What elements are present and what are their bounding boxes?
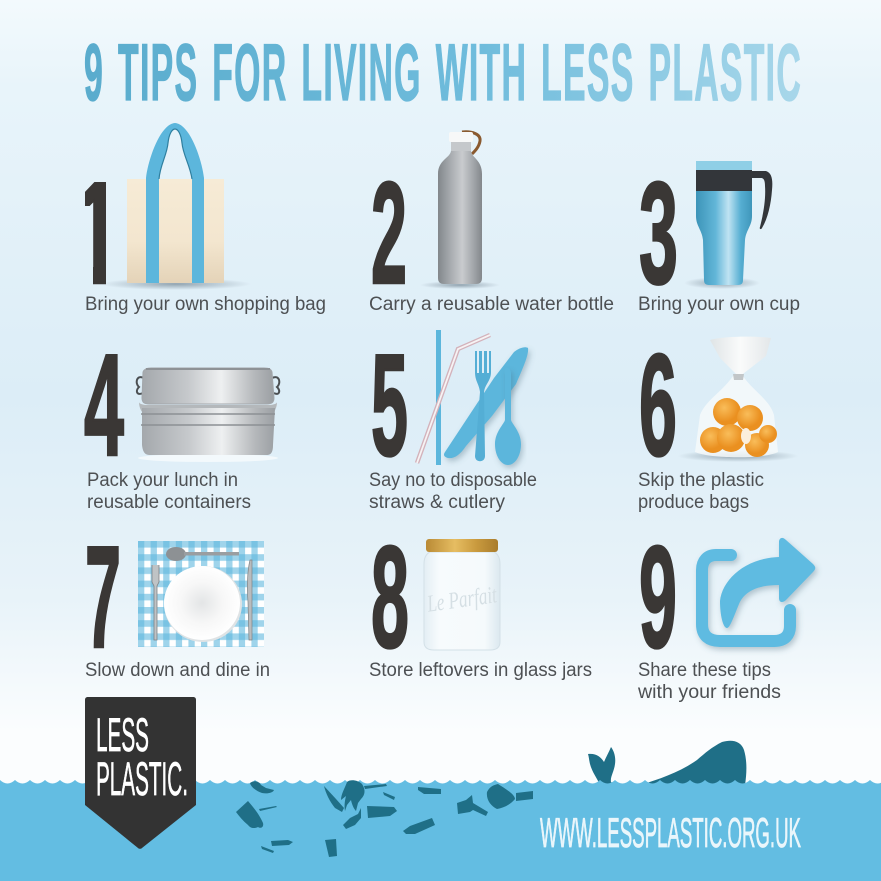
icon: tote bag xyxy=(101,123,251,290)
caption: Store leftovers in glass jars xyxy=(369,660,592,681)
logo text: LESS xyxy=(96,708,149,761)
tip 5: straws and cutlery xyxy=(369,324,537,513)
caption: produce bags xyxy=(638,492,749,513)
tip 6: produce bag xyxy=(638,324,798,513)
icon: metal bottle xyxy=(420,132,500,289)
tip 7: dine in: 7 xyxy=(85,516,121,678)
text: PLASTIC. xyxy=(96,752,188,805)
caption xyxy=(637,660,781,703)
caption: Pack your lunch in xyxy=(87,470,238,491)
caption: Say no to disposable xyxy=(369,470,537,491)
caption: Carry a reusable water bottle xyxy=(369,294,614,315)
caption: Bring your own shopping bag xyxy=(85,294,326,315)
logo text xyxy=(96,708,188,805)
tip 4: lunch container xyxy=(84,324,279,513)
icon: produce bag of oranges xyxy=(678,337,798,462)
icon: travel mug xyxy=(684,161,772,289)
tip 5: straws and cutlery: 5 xyxy=(371,324,408,486)
whale xyxy=(588,741,746,785)
tip 6: produce bag: 6 xyxy=(639,324,677,486)
caption xyxy=(638,470,764,513)
tip 8: glass jars: 8 xyxy=(371,516,409,678)
floating plastic debris xyxy=(236,780,533,857)
icon: glass jar: Le Parfait xyxy=(425,582,499,618)
sea with waves xyxy=(0,780,881,881)
icon: straws and cutlery xyxy=(417,330,528,465)
tip 2: water bottle: 2 xyxy=(371,152,407,314)
caption xyxy=(87,470,251,513)
caption xyxy=(369,470,537,513)
icon: metal lunch box xyxy=(137,368,279,462)
caption: Skip the plastic xyxy=(638,470,764,491)
icon: glass jar xyxy=(424,539,500,650)
tip 1: shopping bag xyxy=(73,123,326,315)
tip 9: share xyxy=(637,516,815,703)
tip 8: glass jars xyxy=(369,516,592,681)
icon: place setting xyxy=(138,541,264,647)
caption: Share these tips xyxy=(638,660,771,681)
number 1: 1 xyxy=(73,152,123,314)
caption: reusable containers xyxy=(87,492,251,513)
caption: Slow down and dine in xyxy=(85,660,270,681)
caption: with your friends xyxy=(637,682,781,703)
caption: straws & cutlery xyxy=(369,492,505,513)
tip 2: water bottle xyxy=(369,132,614,315)
caption: Bring your own cup xyxy=(638,294,800,315)
tip 4: lunch container: 4 xyxy=(84,324,124,486)
tip 7: dine in xyxy=(85,516,270,681)
tip 9: share: 9 xyxy=(639,516,677,678)
tip 3: cup xyxy=(638,152,800,315)
tip 3: cup: 3 xyxy=(639,152,678,314)
icon: share arrow xyxy=(702,538,815,641)
logo badge xyxy=(85,697,196,849)
